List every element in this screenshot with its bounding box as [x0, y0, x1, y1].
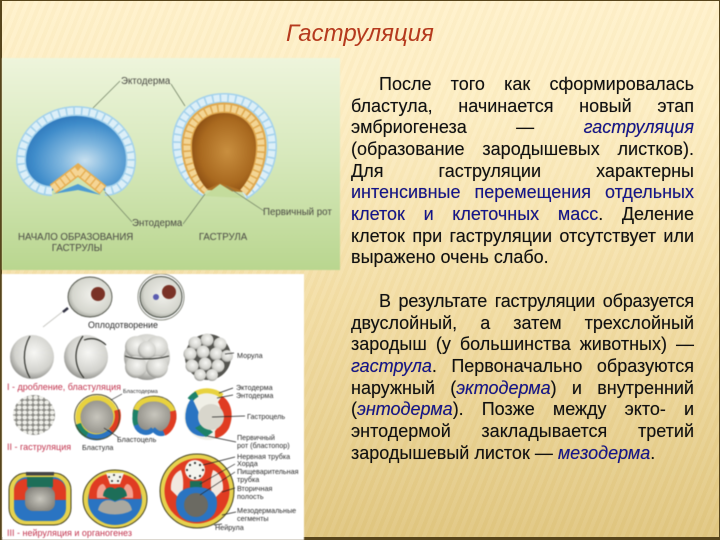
text block: first paragraph: клеток при гаструляции отсутствует или	[351, 226, 694, 246]
text block: first paragraph: (образование зародышевых листков).	[351, 139, 694, 159]
text block: first paragraph	[350, 74, 694, 268]
labels: development stages: полость	[237, 492, 264, 501]
text block: first paragraph: клеток и клеточных масс. Деление	[351, 204, 694, 224]
text block: second paragraph: В результате гаструляции образуется	[379, 291, 694, 311]
labels: gastrula diagram: Первичный рот	[263, 207, 332, 218]
text block: second paragraph	[350, 291, 694, 464]
embryo: gastrula	[177, 98, 272, 198]
stage headings in red: I - дробление, бластуляция	[7, 382, 121, 392]
labels: development stages: Гастроцель	[247, 412, 285, 421]
text block: second paragraph: зародышевый листок — мезодерма.	[351, 443, 655, 463]
labels: development stages: Пищеварительная	[237, 467, 299, 476]
gastrulation embryo stage 1	[74, 394, 120, 440]
gastrulation embryo stage 2	[133, 396, 176, 434]
cleavage: morula	[184, 334, 233, 381]
stage headings in red: III - нейруляция и органогенез	[7, 528, 132, 538]
cleavage: spheres	[10, 334, 170, 380]
text block: first paragraph: эмбриогенеза — гаструляция	[351, 117, 694, 137]
fertilization: eggs	[43, 274, 184, 327]
labels: gastrula diagram: ГАСТРУЛЫ	[52, 243, 102, 254]
text block: second paragraph: (энтодерма). Позже между экто- и	[351, 399, 694, 419]
labels: development stages: Нервная трубка	[237, 452, 290, 461]
labels: development stages: Хорда	[237, 459, 258, 468]
labels: development stages: Бластула	[82, 443, 113, 452]
text block: second paragraph: энтодермой закладывается третий	[351, 421, 694, 441]
labels: development stages: Оплодотворение	[88, 320, 158, 330]
labels: gastrula diagram: Энтодерма	[132, 218, 183, 229]
labels: development stages: Первичный	[237, 433, 275, 442]
labels: development stages: Энтодерма	[236, 391, 273, 400]
labels: gastrula diagram: ГАСТРУЛА	[199, 232, 248, 243]
labels: development stages: трубка	[237, 475, 259, 484]
text block: first paragraph: бластула, начинается новый этап	[351, 96, 694, 116]
labels: development stages	[82, 320, 299, 532]
neurulation embryo 3	[160, 454, 234, 528]
labels: development stages: Морула	[237, 351, 263, 360]
neurulation embryo 1	[9, 472, 71, 525]
labels: development stages: рот (бластопор)	[237, 441, 290, 450]
labels: development stages: Вторичная	[237, 484, 272, 493]
text block: first paragraph: интенсивные перемещения отдельных	[351, 182, 694, 202]
leader lines	[104, 353, 245, 525]
labels: development stages: Бластоцель	[117, 435, 157, 444]
text block: second paragraph: двуслойный, а затем трехслойный	[351, 313, 694, 333]
labels: development stages: Эктодерма	[236, 383, 273, 392]
text block: second paragraph: зародыш (у большинства животных) —	[351, 334, 694, 354]
leader lines	[93, 81, 264, 224]
text block: second paragraph: наружный (эктодерма) и внутренний	[351, 378, 694, 398]
text block: second paragraph: гаструла. Первоначально образуются	[351, 356, 694, 376]
blastula sphere	[13, 395, 55, 435]
panel: gastrula formation diagram	[1, 58, 340, 270]
text block: first paragraph: Для гаструляции характерны	[351, 161, 694, 181]
labels: gastrula diagram: НАЧАЛО ОБРАЗОВАНИЯ	[18, 232, 133, 243]
neurulation embryo 2	[83, 470, 147, 528]
labels: development stages: сегменты	[237, 514, 269, 523]
panel: stages of embryo development	[1, 273, 305, 540]
embryo: early gastrula	[21, 111, 131, 195]
text block: first paragraph: После того как сформировалась	[379, 74, 694, 94]
labels: gastrula diagram	[18, 76, 332, 254]
labels: development stages: Нейрула	[215, 523, 244, 532]
labels: gastrula diagram: Эктодерма	[121, 76, 171, 87]
text block: first paragraph: выражено очень слабо.	[351, 247, 549, 267]
title: Гаструляция	[286, 20, 434, 47]
stage headings in red: II - гаструляция	[7, 442, 71, 452]
labels: development stages: Бластодерма	[123, 389, 159, 395]
stage headings in red	[7, 382, 132, 538]
labels: development stages: Мезодермальные	[237, 506, 296, 515]
gastrulation embryo stage 3	[184, 391, 232, 440]
